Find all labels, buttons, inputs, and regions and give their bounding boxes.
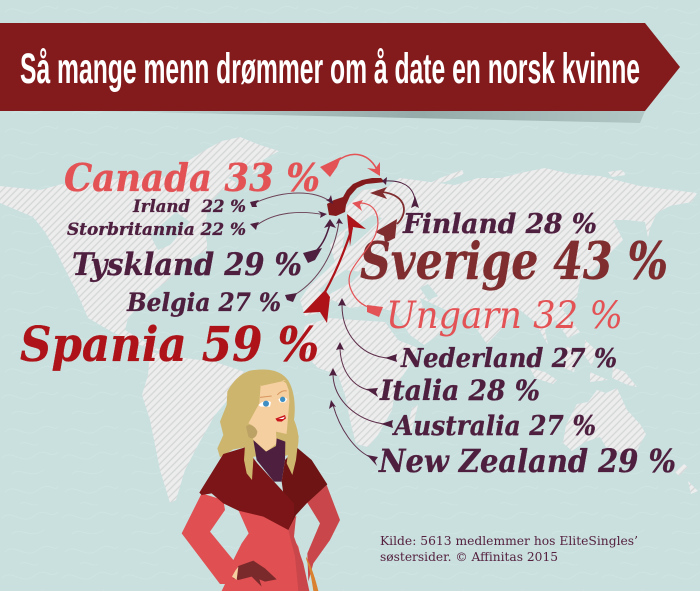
- map: inland seas: [150, 165, 450, 322]
- label: New Zealand 29 %: New Zealand 29 %: [378, 442, 676, 480]
- label: Tyskland 29 %: Tyskland 29 %: [72, 247, 302, 283]
- arrow: Storbritannia: [250, 211, 327, 230]
- source note: søstersider. © Affinitas 2015: [380, 549, 558, 564]
- source note: Kilde: 5613 medlemmer hos EliteSingles’: [380, 533, 638, 548]
- arrow: Canada: [320, 154, 380, 177]
- coat body: [182, 493, 308, 591]
- neck and face: [248, 380, 289, 452]
- arrow: Finland: [382, 177, 419, 208]
- label: Belgia 27 %: Belgia 27 %: [126, 288, 281, 317]
- arrow: Belgia: [285, 218, 343, 302]
- label: Irland 22 %: Irland 22 %: [132, 197, 246, 217]
- ear shadow: [246, 425, 257, 438]
- map: new zealand: [675, 464, 698, 494]
- arrow: Sverige: [370, 187, 404, 243]
- arrow: Nederland: [338, 298, 397, 362]
- arrow: Spania: [303, 214, 366, 323]
- map: madagascar: [406, 405, 418, 432]
- label: Nederland 27 %: Nederland 27 %: [400, 344, 617, 374]
- scarf: [253, 438, 285, 482]
- bag strap: [306, 557, 318, 591]
- map: arctic islands: [428, 170, 626, 184]
- label: Ungarn 32 %: Ungarn 32 %: [386, 294, 623, 337]
- arrow: New Zealand: [329, 400, 378, 466]
- label: Finland 28 %: Finland 28 %: [402, 209, 597, 240]
- world map: [0, 137, 698, 503]
- banner: [0, 23, 680, 111]
- arrow: Irland: [250, 193, 333, 207]
- hair front strands: [244, 440, 253, 480]
- glove: [233, 561, 277, 587]
- map: south east asia islands: [530, 340, 637, 387]
- woman illustration: [182, 369, 340, 591]
- arrow: Ungarn: [349, 200, 383, 317]
- shawl left: [199, 447, 294, 530]
- shawl right: [282, 447, 327, 530]
- arrow: Italia: [336, 342, 378, 397]
- norway highlight: [327, 178, 385, 216]
- map: south america: [142, 352, 245, 503]
- label: Canada 33 %: Canada 33 %: [64, 155, 320, 200]
- arrow: Tyskland: [303, 219, 336, 263]
- map: north america: [0, 137, 279, 355]
- hair back: [217, 369, 298, 457]
- banner shadow: [90, 111, 645, 123]
- map: australia: [563, 388, 646, 454]
- map: africa: [300, 318, 418, 447]
- coat sleeve right: [307, 485, 340, 582]
- map: eurasia: [300, 168, 697, 345]
- arrow: Australia: [329, 368, 393, 428]
- source note: [380, 533, 638, 564]
- label: Spania 59 %: Spania 59 %: [20, 317, 319, 373]
- label: Storbritannia 22 %: Storbritannia 22 %: [67, 220, 246, 240]
- label: Australia 27 %: Australia 27 %: [391, 411, 596, 442]
- label: Italia 28 %: Italia 28 %: [379, 374, 540, 407]
- lips: [275, 415, 286, 422]
- eyes: [258, 401, 271, 407]
